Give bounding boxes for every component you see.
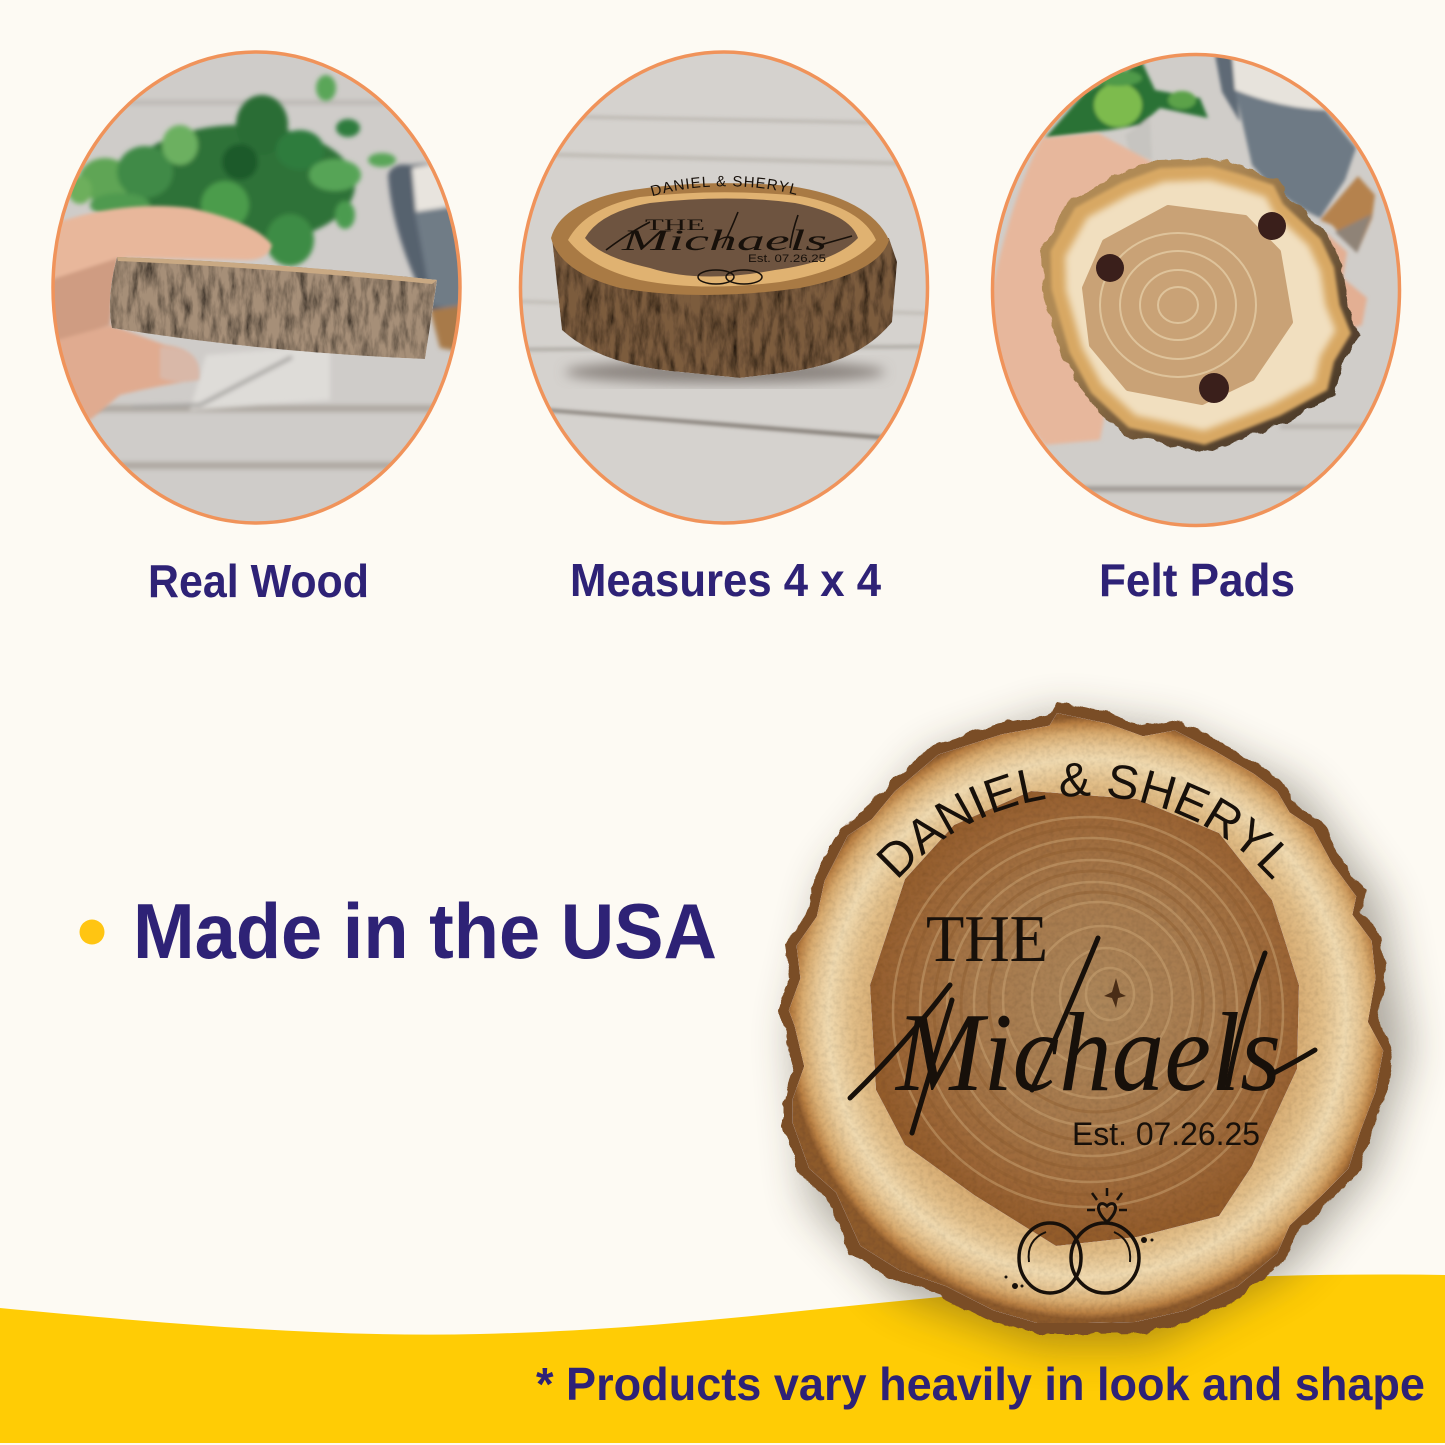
icon: hand bbox=[990, 133, 1367, 445]
engraving: surname: Michaels bbox=[894, 991, 1281, 1115]
engraving: names arc: DANIEL & SHERYL bbox=[876, 763, 1284, 880]
footnote: * Products vary heavily in look and shape bbox=[536, 1358, 1425, 1410]
icon: wedding rings bbox=[1004, 1188, 1154, 1293]
bark slice bbox=[110, 257, 437, 359]
icon: fingers bbox=[50, 206, 272, 420]
tree pith bbox=[1104, 978, 1126, 1008]
icon: mug bbox=[1215, 55, 1375, 253]
coaster engraving: Est. 07.26.25 bbox=[748, 253, 826, 265]
icon: plant bbox=[1045, 62, 1208, 160]
heading: made in the usa: Made in the USA bbox=[133, 887, 717, 975]
coaster engraving: THE bbox=[645, 217, 705, 234]
engraving: surname bbox=[850, 938, 1315, 1133]
panel: measures photo bbox=[518, 50, 930, 525]
coaster body bbox=[565, 360, 885, 384]
coaster engraving: DANIEL & SHERYL bbox=[650, 176, 796, 196]
panel: felt pads photo bbox=[990, 50, 1402, 530]
icon: mug bbox=[388, 158, 462, 352]
yellow wave band bbox=[0, 1275, 1445, 1443]
coaster underside bbox=[1042, 158, 1360, 453]
label: real wood: Real Wood bbox=[148, 555, 369, 607]
engraving: established date: Est. 07.26.25 bbox=[1072, 1116, 1260, 1152]
heartwood bbox=[870, 791, 1299, 1246]
label: felt pads: Felt Pads bbox=[1099, 554, 1295, 606]
panel: large engraved coaster bbox=[778, 702, 1392, 1336]
growth rings bbox=[893, 817, 1283, 1207]
sapwood bbox=[789, 713, 1383, 1323]
felt pads bbox=[1096, 212, 1286, 403]
bullet bbox=[80, 920, 104, 944]
coaster engraving: Michaels bbox=[620, 224, 827, 257]
bark edge bbox=[778, 702, 1394, 1334]
icon: plant bbox=[68, 75, 396, 266]
label: measures: Measures 4 x 4 bbox=[570, 554, 881, 606]
coaster engraving bbox=[606, 176, 852, 285]
coaster shadow bbox=[795, 716, 1408, 1345]
engraving: the: THE bbox=[926, 902, 1048, 976]
panel: real wood photo bbox=[50, 50, 462, 526]
